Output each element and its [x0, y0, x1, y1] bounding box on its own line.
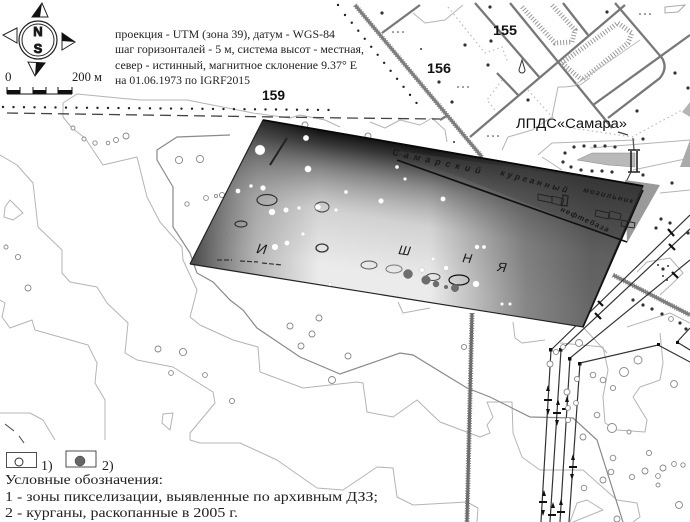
railway lines [355, 5, 690, 522]
legend symbol 2 [66, 451, 114, 474]
grey circles: excavated kurgans [404, 270, 459, 292]
icon: compass rose [3, 3, 75, 76]
scale bar: 0 [5, 69, 12, 84]
dotted line of markers [3, 5, 419, 110]
legend symbol 1: 1) [41, 459, 53, 474]
compass letters: N [33, 24, 43, 39]
small black dots [380, 5, 690, 331]
darker contour line [157, 135, 623, 522]
legend text: 2 - курганы, раскопанные в 2005 г. [5, 506, 238, 521]
text block: map projection notes: шаг горизонталей - 5 м, система высот - местная, [115, 44, 364, 56]
white circles: pixelization zones on photo [236, 135, 512, 306]
map labels: ЛПДС«Самара» [516, 116, 627, 131]
text block: map projection notes [115, 29, 364, 87]
icon: tower symbol [519, 60, 525, 73]
handwritten text on photo: И [256, 240, 269, 258]
map labels: 159 [262, 87, 285, 103]
dotted boundaries [448, 7, 682, 137]
handwritten text on photo: Н [462, 250, 474, 266]
legend text [5, 473, 378, 521]
handwritten text on photo: нефтебаза [559, 205, 610, 234]
hatched areas [522, 5, 640, 85]
roads [382, 3, 690, 137]
text block: map projection notes: на 01.06.1973 по IGRF2015 [115, 75, 250, 87]
compass letters: S [34, 41, 43, 56]
map labels: 156 [427, 60, 451, 76]
thick diagonal line on photo [397, 160, 627, 242]
rings on photo [235, 194, 469, 285]
small legend stroke on photo [217, 260, 282, 265]
text block: map projection notes: проекция - UTM (зона 39), датум - WGS-84 [115, 29, 335, 41]
handwritten text on photo [256, 147, 635, 275]
map labels: 155 [493, 22, 517, 38]
pipeline valve markers [539, 229, 679, 516]
compass letters [33, 24, 43, 56]
scale bar [5, 69, 102, 94]
map labels [262, 22, 627, 131]
legend symbol 2: 2) [102, 459, 114, 474]
legend text: Условные обозначения: [5, 473, 163, 488]
legend text: 1 - зоны пикселизации, выявленные по архивным ДЗЗ; [5, 490, 378, 505]
handwritten text on photo: Я [496, 259, 508, 275]
arrow on photo [270, 138, 287, 165]
dashed boundary line [7, 113, 440, 119]
handwritten text on photo: Ш [398, 242, 412, 259]
handwritten text on photo: могильник [583, 185, 635, 206]
pipelines [541, 215, 690, 522]
text block: map projection notes: север - истинный, магнитное склонение 9.37° E [115, 60, 357, 72]
legend symbol 1 [6, 452, 53, 474]
lake and bridge [577, 5, 690, 182]
buildings on photo [538, 194, 635, 228]
open circles: pixelization zones on map [4, 122, 685, 522]
handwritten text on photo: курганный [499, 167, 569, 195]
scale bar: 200 м [72, 69, 102, 84]
small black strokes near legend [5, 424, 24, 443]
handwritten text on photo: Самарский [392, 147, 482, 176]
panel: aerial photo overlay [180, 110, 660, 335]
legend [5, 451, 378, 521]
